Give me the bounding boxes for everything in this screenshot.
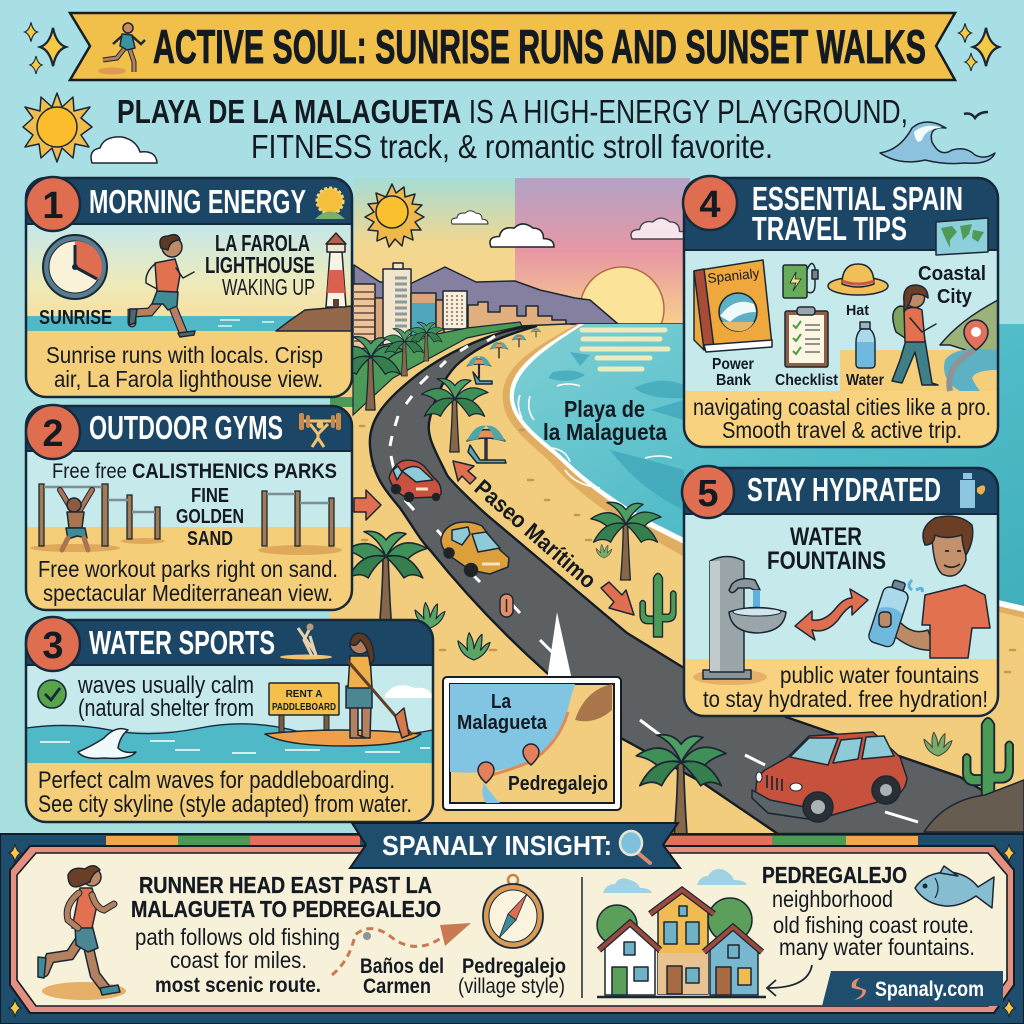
insight body text bbox=[135, 924, 340, 997]
rent a paddleboard sign bbox=[269, 683, 339, 732]
setting sun bbox=[580, 266, 665, 324]
panel body text bbox=[703, 662, 988, 712]
panel body text: See city skyline (style adapted) from water. bbox=[38, 791, 412, 818]
icon: compass bbox=[483, 875, 543, 948]
insight heading text: MALAGUETA TO PEDREGALEJO bbox=[131, 896, 441, 922]
panel body text bbox=[38, 767, 412, 818]
item labels: Bank bbox=[716, 372, 751, 389]
inset labels bbox=[457, 691, 608, 795]
desert plants bbox=[415, 544, 1013, 803]
title banner bbox=[70, 13, 955, 80]
central beach map scene bbox=[330, 178, 1024, 834]
panel body text: to stay hydrated. free hydration! bbox=[703, 686, 988, 712]
decorative sparkles left bbox=[25, 22, 66, 74]
panel body text bbox=[38, 556, 338, 606]
insight heading text: RUNNER HEAD EAST PAST LA bbox=[139, 872, 432, 898]
icon: wave bbox=[78, 729, 136, 758]
divider bbox=[581, 877, 583, 998]
panel body text: air, La Farola lighthouse view. bbox=[54, 366, 323, 392]
icon: bird bbox=[964, 112, 988, 118]
icon: hat bbox=[828, 264, 888, 295]
curved arrow to village bbox=[767, 965, 812, 996]
coastal city label bbox=[918, 263, 986, 308]
number badge bbox=[26, 177, 80, 231]
icon: weightlifter bbox=[299, 413, 341, 447]
insight body text: most scenic route. bbox=[155, 974, 321, 997]
heading ribbon: SPANALY INSIGHT: bbox=[382, 830, 612, 861]
route labels bbox=[360, 955, 566, 998]
water fountains label bbox=[767, 523, 886, 575]
arrow: down-right along promenade bbox=[601, 582, 634, 615]
inset labels: La bbox=[491, 691, 512, 713]
map inset: route bbox=[443, 612, 621, 810]
panel: 5 stay hydrated bbox=[682, 466, 998, 717]
neighborhood text: old fishing coast route. bbox=[773, 912, 974, 938]
colour strips bbox=[106, 836, 918, 845]
heading: STAY HYDRATED bbox=[747, 471, 941, 508]
beach label: la Malagueta bbox=[543, 419, 667, 445]
icon: checklist bbox=[785, 307, 828, 367]
lighthouse label: WAKING UP bbox=[222, 274, 315, 300]
route labels: Carmen bbox=[363, 975, 431, 998]
panel: 2 outdoor gyms bbox=[26, 405, 352, 611]
icon: water bottle bbox=[856, 322, 875, 368]
text: fine golden sand: SAND bbox=[187, 528, 233, 550]
icon: wave bbox=[880, 122, 995, 164]
icon: sun bbox=[23, 93, 92, 162]
number badge: 1 bbox=[42, 185, 64, 227]
panel body text: spectacular Mediterranean view. bbox=[43, 580, 333, 606]
icon: bottle bbox=[960, 473, 985, 508]
beach umbrellas and loungers bbox=[467, 328, 541, 463]
item labels: Water bbox=[846, 372, 884, 389]
heading bbox=[752, 180, 963, 247]
beach label bbox=[543, 396, 667, 445]
icon: cloud bbox=[91, 137, 157, 163]
rent a paddleboard sign: RENT A bbox=[286, 689, 322, 700]
yellow car bbox=[441, 522, 509, 576]
text: fine golden sand: GOLDEN bbox=[176, 506, 244, 528]
inset labels: Malagueta bbox=[457, 712, 548, 734]
text: waves calm: (natural shelter from bbox=[78, 695, 254, 722]
number badge bbox=[682, 466, 734, 518]
calisthenics bars with figure bbox=[30, 484, 342, 555]
number badge bbox=[683, 176, 737, 230]
horizon line bbox=[570, 323, 684, 325]
arrow: up-left along promenade bbox=[453, 461, 476, 484]
lighthouse label bbox=[205, 230, 315, 300]
route labels: (village style) bbox=[458, 975, 565, 998]
lighthouse label: LA FAROLA bbox=[215, 230, 310, 256]
text: waves calm bbox=[77, 672, 254, 722]
neighborhood text: neighborhood bbox=[772, 886, 893, 912]
panel body text bbox=[46, 342, 323, 392]
route labels: Baños del bbox=[360, 955, 444, 978]
neighborhood text bbox=[762, 862, 975, 960]
mountains bbox=[354, 265, 618, 324]
palm trees bbox=[338, 322, 726, 834]
icon: runner bbox=[129, 235, 195, 337]
route labels: Pedregalejo bbox=[462, 955, 566, 978]
hat label: Hat bbox=[846, 302, 869, 319]
intro subtitle bbox=[117, 93, 908, 165]
small red car bbox=[389, 460, 441, 502]
road marker bbox=[500, 594, 513, 617]
icon: fish bbox=[915, 866, 994, 908]
icon: location pin bbox=[964, 320, 988, 350]
intro subtitle: PLAYA DE LA MALAGUETA IS A HIGH-ENERGY PLAYGROUND, bbox=[117, 93, 908, 130]
lighthouse label: LIGHTHOUSE bbox=[205, 252, 315, 278]
sand base bbox=[330, 324, 1024, 834]
number badge bbox=[26, 617, 80, 671]
road name label: Paseo Marítimo bbox=[470, 474, 601, 593]
neighborhood text: PEDREGALEJO bbox=[762, 862, 907, 888]
panel: 3 water sports bbox=[26, 617, 433, 823]
man with water bottle bbox=[867, 516, 990, 658]
panel body text: Smooth travel & active trip. bbox=[722, 417, 962, 443]
item labels: Power bbox=[712, 356, 754, 373]
panel: 4 essential travel tips bbox=[683, 176, 998, 448]
dashed route arrow bbox=[332, 923, 471, 975]
panel body text: public water fountains bbox=[780, 662, 979, 688]
number badge: 3 bbox=[42, 625, 64, 667]
brand tag bbox=[822, 971, 1003, 1006]
icon: magnifier bbox=[620, 831, 650, 863]
text: waves calm: waves usually calm bbox=[77, 672, 254, 699]
map pins bbox=[478, 744, 539, 783]
icon: power bank bbox=[783, 263, 818, 298]
icon: paddle figure bbox=[280, 624, 332, 660]
icon: sunrise bbox=[315, 188, 345, 219]
panel body text: Free workout parks right on sand. bbox=[38, 556, 338, 582]
insight body text: coast for miles. bbox=[170, 947, 307, 973]
arrow: toward road bbox=[354, 490, 381, 520]
heading: TRAVEL TIPS bbox=[752, 210, 907, 247]
text: fine golden sand: FINE bbox=[191, 485, 229, 507]
panel: Spanaly insight footer bbox=[0, 823, 1024, 1024]
panel body text bbox=[693, 394, 991, 443]
number badge: 2 bbox=[42, 413, 64, 455]
green hedge bbox=[330, 322, 522, 415]
sea bbox=[503, 324, 1024, 618]
sky clouds bbox=[451, 211, 689, 247]
village houses bbox=[597, 890, 766, 997]
icon: guide book: Spanialy bbox=[707, 266, 760, 286]
number badge: 4 bbox=[699, 184, 721, 226]
icon: map bbox=[936, 218, 988, 255]
water fountains label: WATER bbox=[790, 523, 862, 551]
small sunrise sun bbox=[365, 184, 424, 247]
text: fine golden sand bbox=[176, 485, 244, 550]
sunrise label: SUNRISE bbox=[39, 307, 112, 329]
icon: lighthouse bbox=[326, 233, 346, 307]
icon: clock bbox=[43, 235, 107, 299]
large red car bbox=[752, 732, 907, 822]
inset labels: Pedregalejo bbox=[508, 773, 608, 795]
icon: runner bbox=[98, 23, 145, 74]
brand tag: Spanaly.com bbox=[875, 978, 984, 1001]
woman runner bbox=[38, 866, 126, 1000]
city skyline bbox=[353, 263, 566, 350]
number badge: 5 bbox=[697, 473, 719, 515]
icon: double arrow bbox=[795, 589, 868, 640]
heading ribbon bbox=[350, 823, 680, 868]
item labels bbox=[712, 356, 884, 389]
insight body text: path follows old fishing bbox=[135, 924, 340, 950]
item labels: Checklist bbox=[775, 372, 838, 389]
intro subtitle: FITNESS track, & romantic stroll favorite. bbox=[251, 128, 773, 165]
insight heading text bbox=[131, 872, 441, 922]
number badge bbox=[26, 405, 80, 459]
heading: WATER SPORTS bbox=[89, 624, 275, 661]
paddleboarder bbox=[265, 633, 421, 746]
icon: fountain bbox=[693, 556, 786, 685]
rent a paddleboard sign: PADDLEBOARD bbox=[272, 702, 336, 713]
icon: guide book bbox=[694, 260, 772, 352]
sky: sunrise and sunset halves bbox=[354, 178, 690, 325]
corner ornaments bbox=[9, 844, 1015, 1017]
hiker traveler bbox=[892, 285, 938, 385]
heading: OUTDOOR GYMS bbox=[89, 409, 283, 446]
panel body text: Perfect calm waves for paddleboarding. bbox=[38, 767, 395, 794]
neighborhood text: many water fountains. bbox=[779, 934, 975, 960]
coastal city label: Coastal bbox=[918, 263, 986, 285]
coastal city label: City bbox=[937, 286, 973, 308]
heading: MORNING ENERGY bbox=[89, 183, 306, 220]
icon: check bbox=[38, 680, 66, 708]
panel body text: Sunrise runs with locals. Crisp bbox=[46, 342, 323, 368]
road: Paseo Maritimo bbox=[370, 326, 1024, 834]
rock bbox=[924, 780, 1024, 832]
inset pointer bbox=[547, 612, 572, 680]
sand specks bbox=[360, 426, 1015, 740]
panel: 1 morning energy bbox=[26, 177, 352, 397]
text: calisthenics parks: Free free CALISTHENICS PARKS bbox=[52, 460, 337, 483]
water fountains label: FOUNTAINS bbox=[767, 547, 886, 575]
beach label: Playa de bbox=[564, 396, 645, 422]
decorative sparkles right bbox=[959, 23, 999, 71]
insight clouds bbox=[603, 869, 747, 893]
